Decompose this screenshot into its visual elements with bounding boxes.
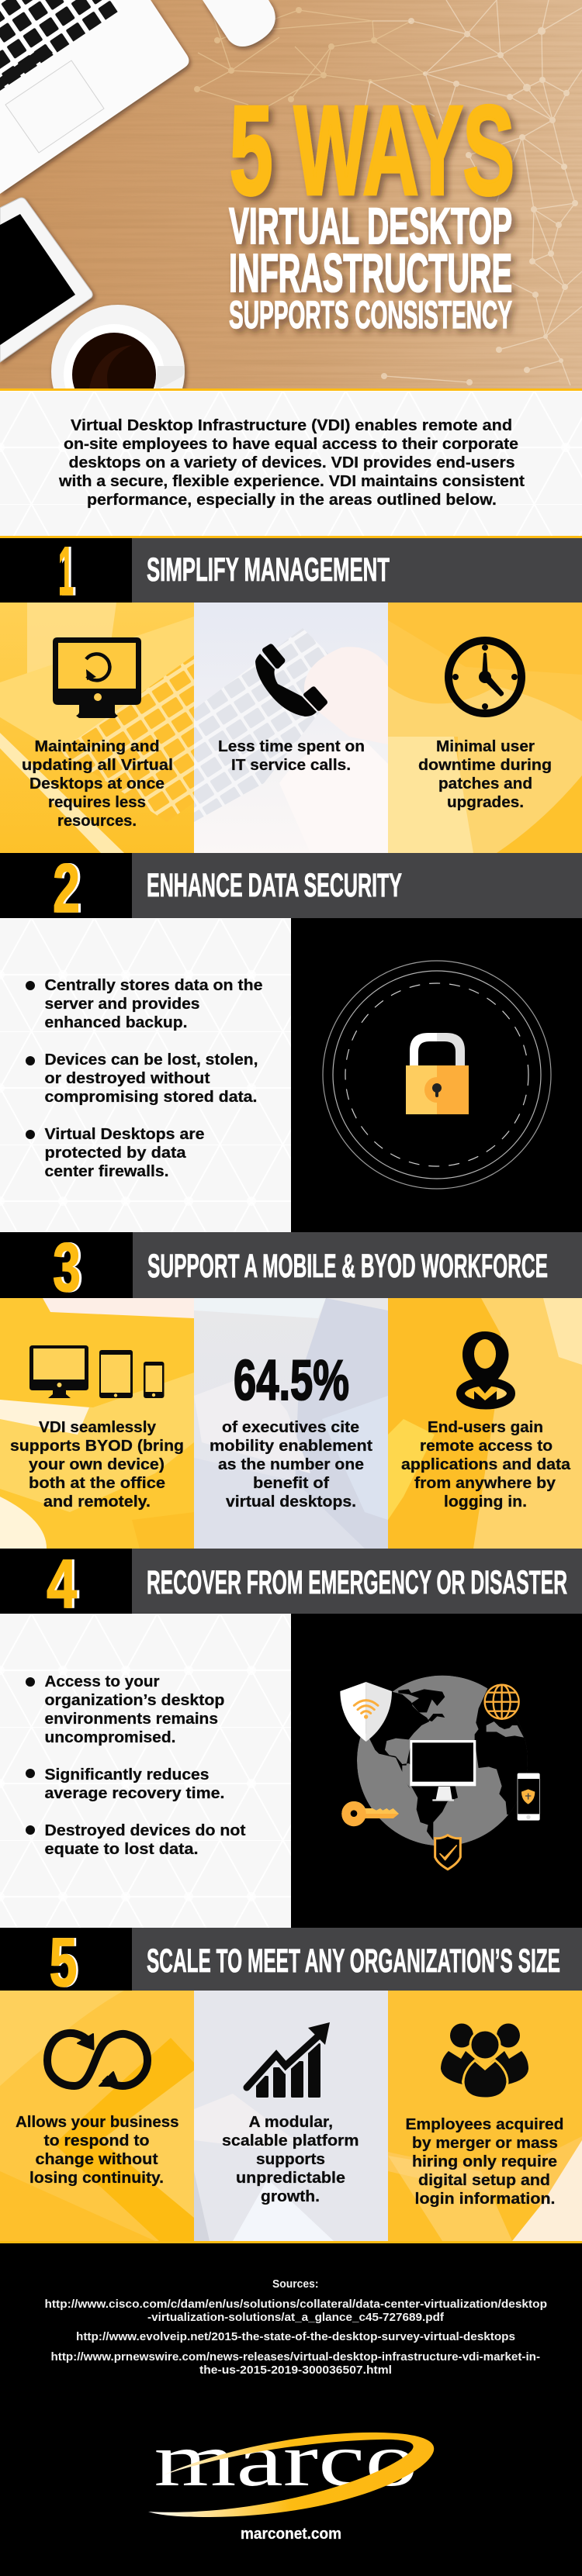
hero panel: wood desk — [0, 0, 582, 438]
column 3 text: End-users gain — [428, 1418, 543, 1436]
column 2 photo — [194, 1991, 388, 2241]
column 3 text — [418, 737, 552, 811]
number 4: 4 — [47, 1545, 77, 1622]
column 3 text: by merger or mass — [412, 2134, 558, 2152]
column 2 text: virtual desktops. — [226, 1493, 356, 1511]
icon: telephone — [255, 644, 327, 717]
globe map — [357, 1676, 541, 1846]
bullet list: equate to lost data. — [45, 1840, 199, 1858]
column 3 text: applications and data — [401, 1455, 571, 1473]
monitor — [410, 1740, 476, 1801]
sources: http://www.evolveip.net/2015-the-state-of-the-desktop-survey-virtual-desktops — [76, 2330, 515, 2343]
column 1 text: and remotely. — [43, 1493, 151, 1511]
column 1 photo — [0, 603, 194, 853]
footer panel — [0, 2241, 582, 2576]
sea — [487, 1721, 524, 1738]
icon: concentric rings — [323, 961, 551, 1189]
bullet list: Devices can be lost, stolen, — [45, 1051, 258, 1069]
column 2 text: scalable platform — [222, 2132, 359, 2150]
marco logo — [148, 2419, 434, 2517]
section 4 header — [0, 1545, 582, 1622]
icon: people group — [441, 2024, 528, 2098]
section 2 header — [0, 849, 582, 927]
network lines — [194, 0, 425, 109]
column 1 text: losing continuity. — [29, 2169, 164, 2187]
column 2 text: supports — [256, 2150, 325, 2168]
panel: simplify management — [0, 603, 582, 853]
sources: -virtualization-solutions/at_a_glance_c45-727689.pdf — [147, 2311, 445, 2324]
bullet list: Virtual Desktops are — [45, 1125, 205, 1143]
bullet list: Destroyed devices do not — [45, 1822, 246, 1839]
intro text: with a secure, flexible experience. VDI maintains consistent — [58, 472, 525, 490]
icon: infinity loop — [47, 2033, 147, 2086]
intro text: desktops on a variety of devices. VDI provides end-users — [68, 454, 515, 471]
number 4: 4 — [49, 1545, 79, 1622]
column 2 photo — [194, 1298, 388, 1549]
bullet list: center firewalls. — [45, 1162, 168, 1180]
bullet list: enhanced backup. — [45, 1013, 188, 1031]
column 2 text: growth. — [261, 2188, 320, 2205]
icon: growth chart — [247, 2022, 330, 2098]
intro panel — [0, 388, 582, 538]
column 1 text: to respond to — [43, 2132, 149, 2150]
section 3 header — [0, 1228, 582, 1306]
panel: support a mobile workforce — [0, 1298, 582, 1549]
column 3 text: downtime during — [418, 756, 552, 774]
icon: mouse — [203, 0, 275, 47]
column 2 text: as the number one — [218, 1455, 364, 1473]
icon: devices — [29, 1345, 165, 1398]
marco logo: marco — [154, 2419, 417, 2502]
column 2 text — [218, 737, 365, 774]
icon: location pin — [461, 1331, 511, 1405]
column 2 text: unpredictable — [236, 2169, 345, 2187]
column 1 text: VDI seamlessly — [39, 1418, 157, 1436]
icon: coffee cup — [51, 305, 185, 438]
icon: globe with devices — [340, 1676, 541, 1870]
column 1 text: Allows your business — [16, 2113, 178, 2131]
bullet list: environments remains — [45, 1710, 218, 1728]
bullet list — [26, 1673, 246, 1858]
heading: simplify management: SIMPLIFY MANAGEMENT — [147, 552, 390, 589]
number 1 — [58, 532, 76, 609]
phone — [518, 1773, 540, 1821]
icon: monitor with refresh — [53, 637, 141, 718]
column 3 photo — [388, 1298, 582, 1549]
intro text — [58, 416, 525, 509]
key — [341, 1801, 399, 1826]
column 3 text: Employees acquired — [405, 2115, 563, 2133]
check shield — [435, 1835, 460, 1870]
bullet list: Significantly reduces — [45, 1766, 210, 1784]
column 3 text: Minimal user — [436, 737, 535, 755]
column 1 photo — [0, 1991, 194, 2241]
column 1 text — [10, 1418, 184, 1511]
column 2 text — [222, 2113, 359, 2205]
section 5 header — [0, 1923, 582, 2001]
column 1 text: both at the office — [29, 1474, 165, 1492]
column 2 text: A modular, — [248, 2113, 333, 2131]
sources: http://www.prnewswire.com/news-releases/virtual-desktop-infrastructure-vdi-market-in- — [51, 2350, 540, 2364]
column 1 text — [16, 2113, 178, 2187]
column 1 text: resources. — [57, 812, 137, 830]
column 3 text: hiring only require — [412, 2153, 557, 2170]
heading: enhance data security: ENHANCE DATA SECURITY — [147, 868, 402, 904]
sources: the-us-2015-2019-300036507.html — [199, 2364, 392, 2377]
bullet list: compromising stored data. — [45, 1088, 258, 1106]
column 2 photo — [194, 603, 388, 853]
bullet list: or destroyed without — [45, 1069, 210, 1087]
bullet list: server and provides — [45, 995, 200, 1013]
column 3 photo — [388, 603, 582, 853]
column 1 text: change without — [36, 2150, 158, 2168]
column 3 text: from anywhere by — [414, 1474, 556, 1492]
number 3: 3 — [55, 1228, 83, 1306]
column 1 text: Desktops at once — [29, 775, 165, 792]
title — [229, 79, 514, 337]
icon: laptop — [0, 0, 189, 194]
panel: enhance data security — [0, 918, 582, 1232]
bullet list: protected by data — [45, 1144, 186, 1162]
number 5: 5 — [51, 1923, 79, 2001]
section 1 header: 1 — [58, 532, 74, 609]
column 1 text — [22, 737, 173, 830]
sources — [45, 2277, 547, 2377]
number 2: 2 — [53, 849, 80, 927]
number 3: 3 — [53, 1228, 81, 1306]
column 3 text: upgrades. — [447, 793, 524, 811]
bullet list — [26, 976, 262, 1180]
column 3 text: digital setup and — [418, 2171, 550, 2189]
column 1 text: supports BYOD (bring — [10, 1437, 184, 1455]
icon: clock — [449, 641, 521, 713]
number 5: 5 — [50, 1923, 78, 2001]
bullet list: uncompromised. — [45, 1728, 176, 1746]
column 1 text: your own device) — [29, 1455, 165, 1473]
bullet list: organization’s desktop — [45, 1691, 225, 1709]
stat: 64.5%: 64.5% — [234, 1349, 349, 1412]
icon: padlock — [406, 1033, 469, 1114]
column 2 text: of executives cite — [222, 1418, 359, 1436]
column 3 text: logging in. — [444, 1493, 527, 1511]
icon: tablet — [0, 198, 92, 362]
bullet list: average recovery time. — [45, 1784, 225, 1802]
column 3 text — [401, 1418, 571, 1511]
column 3 photo — [388, 1991, 582, 2241]
section 1 header: 1 — [61, 532, 76, 609]
column 3 text: login information. — [414, 2190, 556, 2208]
column 2 text — [210, 1418, 372, 1511]
column 1 photo — [0, 1298, 194, 1549]
column 2 text: Less time spent on — [218, 737, 365, 755]
column 3 text: patches and — [438, 775, 532, 792]
sources: Sources: — [272, 2277, 318, 2291]
website: marconet.com — [241, 2525, 341, 2543]
column 1 text: updating all Virtual — [22, 756, 173, 774]
panel: scale to any size — [0, 1991, 582, 2241]
column 2 text: benefit of — [253, 1474, 329, 1492]
bullet list: Centrally stores data on the — [45, 976, 262, 994]
intro text: performance, especially in the areas outlined below. — [87, 491, 497, 509]
column 3 text — [405, 2115, 563, 2208]
sources: http://www.cisco.com/c/dam/en/us/solutions/collateral/data-center-virtualization/desktop — [45, 2298, 547, 2311]
bullet list: Access to your — [45, 1673, 160, 1690]
intro text: on-site employees to have equal access to their corporate — [64, 435, 518, 453]
column 2 text: IT service calls. — [231, 756, 351, 774]
column 2 text: mobility enablement — [210, 1437, 372, 1455]
intro text: Virtual Desktop Infrastructure (VDI) enables remote and — [71, 416, 512, 434]
number 2: 2 — [55, 849, 82, 927]
section 1 header — [0, 532, 582, 609]
panel: recover from emergency — [0, 1614, 582, 1928]
column 1 text: requires less — [48, 793, 146, 811]
column 3 text: remote access to — [420, 1437, 553, 1455]
orange globe — [485, 1685, 519, 1719]
wifi shield — [340, 1682, 392, 1742]
column 1 text: Maintaining and — [34, 737, 160, 755]
